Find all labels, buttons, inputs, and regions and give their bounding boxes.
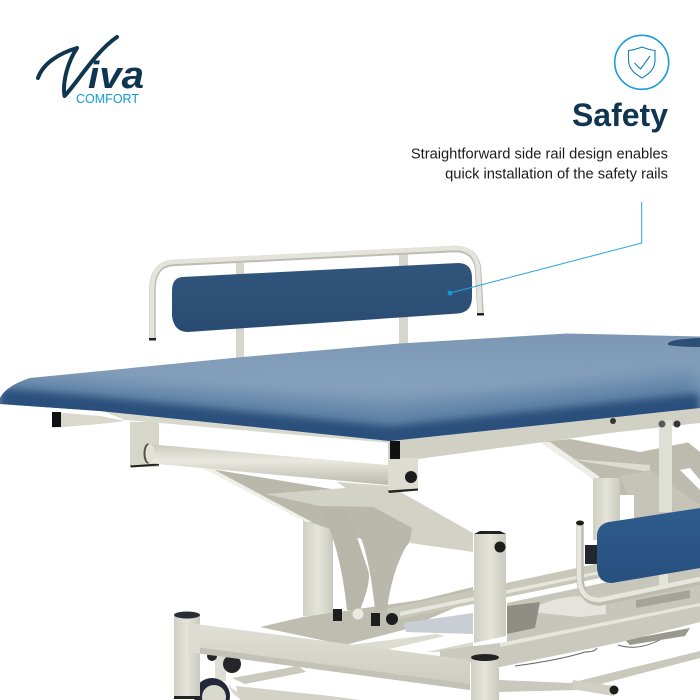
caster stem <box>215 655 226 681</box>
underside edge <box>100 410 390 443</box>
bracket knob <box>405 471 417 483</box>
pivot washer <box>352 608 364 620</box>
right fin <box>348 510 407 610</box>
caster wheel <box>194 678 230 700</box>
description line 2: quick installation of the safety rails <box>445 166 668 182</box>
cross strut <box>265 488 380 507</box>
logo flourish <box>38 37 117 96</box>
near rail tube highlight <box>579 525 700 600</box>
handle cap <box>610 686 618 694</box>
front bracket <box>388 458 418 491</box>
front black cap <box>390 441 400 459</box>
rear bracket <box>52 412 125 428</box>
far-right undercarriage <box>540 428 700 540</box>
caster rear knob <box>207 651 217 661</box>
rail tube feet <box>149 313 484 340</box>
silver disc <box>530 596 606 617</box>
near rail lower post <box>659 570 668 590</box>
left post foot <box>174 696 200 699</box>
right beam highlight <box>500 603 700 647</box>
base frame <box>174 531 700 700</box>
clamp bolt <box>658 420 666 428</box>
front beam <box>188 623 470 690</box>
caster and foot bar <box>194 628 700 700</box>
logo wordmark: iva <box>88 55 144 97</box>
dark block <box>585 545 597 564</box>
description line 1: Straightforward side rail design enables <box>411 146 668 162</box>
lift arm <box>337 482 473 552</box>
rear frame plate <box>540 439 700 530</box>
near rail cap <box>576 520 584 526</box>
table frame band <box>388 408 700 462</box>
fin gap <box>620 495 634 527</box>
near pad <box>597 508 700 583</box>
rear arm strip <box>540 442 600 480</box>
front beam shadow <box>188 646 470 690</box>
base plate <box>260 587 473 645</box>
near rail tube <box>580 525 700 602</box>
table surface <box>0 334 700 441</box>
long rails <box>385 563 600 620</box>
caster knob <box>223 655 241 673</box>
rear fin <box>620 470 700 525</box>
gap highlights <box>568 428 700 490</box>
mechanism plate <box>507 562 700 645</box>
foot handle <box>572 680 614 696</box>
square post knob <box>494 542 506 552</box>
foot loop lower <box>229 678 345 700</box>
callout leader line <box>448 202 642 296</box>
logo tagline: COMFORT <box>76 92 139 106</box>
lit rear plate <box>427 642 473 652</box>
wires <box>515 637 665 666</box>
rail continuation <box>600 545 700 580</box>
mid shading <box>0 390 700 424</box>
lit under plate <box>350 634 445 650</box>
side pad <box>172 263 472 332</box>
description text <box>411 146 668 182</box>
cross tube <box>145 444 388 485</box>
clamp knob <box>674 420 680 428</box>
left block <box>333 609 342 621</box>
rail tube <box>152 249 480 338</box>
beam over left post <box>188 623 200 654</box>
table top <box>0 334 700 441</box>
rear strut <box>571 459 650 472</box>
centre lift and base <box>200 467 700 652</box>
frame bolt <box>610 418 616 424</box>
far side rail with pad <box>149 248 484 358</box>
plate edge <box>200 467 312 522</box>
tube joint <box>144 444 152 464</box>
centre square post <box>474 534 506 643</box>
near side rail with pad <box>576 418 700 602</box>
left fin <box>320 507 369 610</box>
foot loop upper <box>232 666 306 684</box>
left bracket <box>130 422 159 467</box>
right beam <box>440 603 700 667</box>
rail tube highlight <box>152 248 480 338</box>
foot loop tube <box>236 686 360 700</box>
long rail lower <box>400 571 600 616</box>
left bracket foot <box>130 464 159 468</box>
tube end <box>146 444 154 463</box>
edge shading <box>0 400 700 438</box>
heading: Safety: Safety <box>572 97 668 133</box>
square post cap <box>474 531 506 534</box>
icon: shield with check in circle <box>615 35 669 89</box>
leader <box>450 202 642 293</box>
bed brackets and tube <box>52 410 418 493</box>
mechanism shadow <box>507 602 540 634</box>
face hole <box>668 338 700 347</box>
near rail upright <box>659 420 672 512</box>
callout dot <box>448 290 452 296</box>
front bracket foot <box>388 488 418 493</box>
rear column <box>593 478 620 540</box>
actuator box <box>625 628 690 645</box>
pivot hardware <box>333 608 398 626</box>
rail posts <box>236 251 408 358</box>
lift plate <box>205 468 415 545</box>
foot bar right <box>499 651 700 692</box>
rear bracket cap <box>52 412 61 427</box>
right corner post <box>471 658 499 700</box>
right post cap <box>471 654 499 661</box>
mechanism housing <box>403 613 473 634</box>
left corner post <box>174 615 200 697</box>
logo: Viva Comfort <box>38 37 144 106</box>
central column <box>303 515 333 616</box>
caster hub <box>202 685 226 700</box>
knob <box>386 613 398 625</box>
steel block <box>636 590 690 608</box>
left post cap <box>174 612 200 618</box>
right block <box>371 613 380 626</box>
